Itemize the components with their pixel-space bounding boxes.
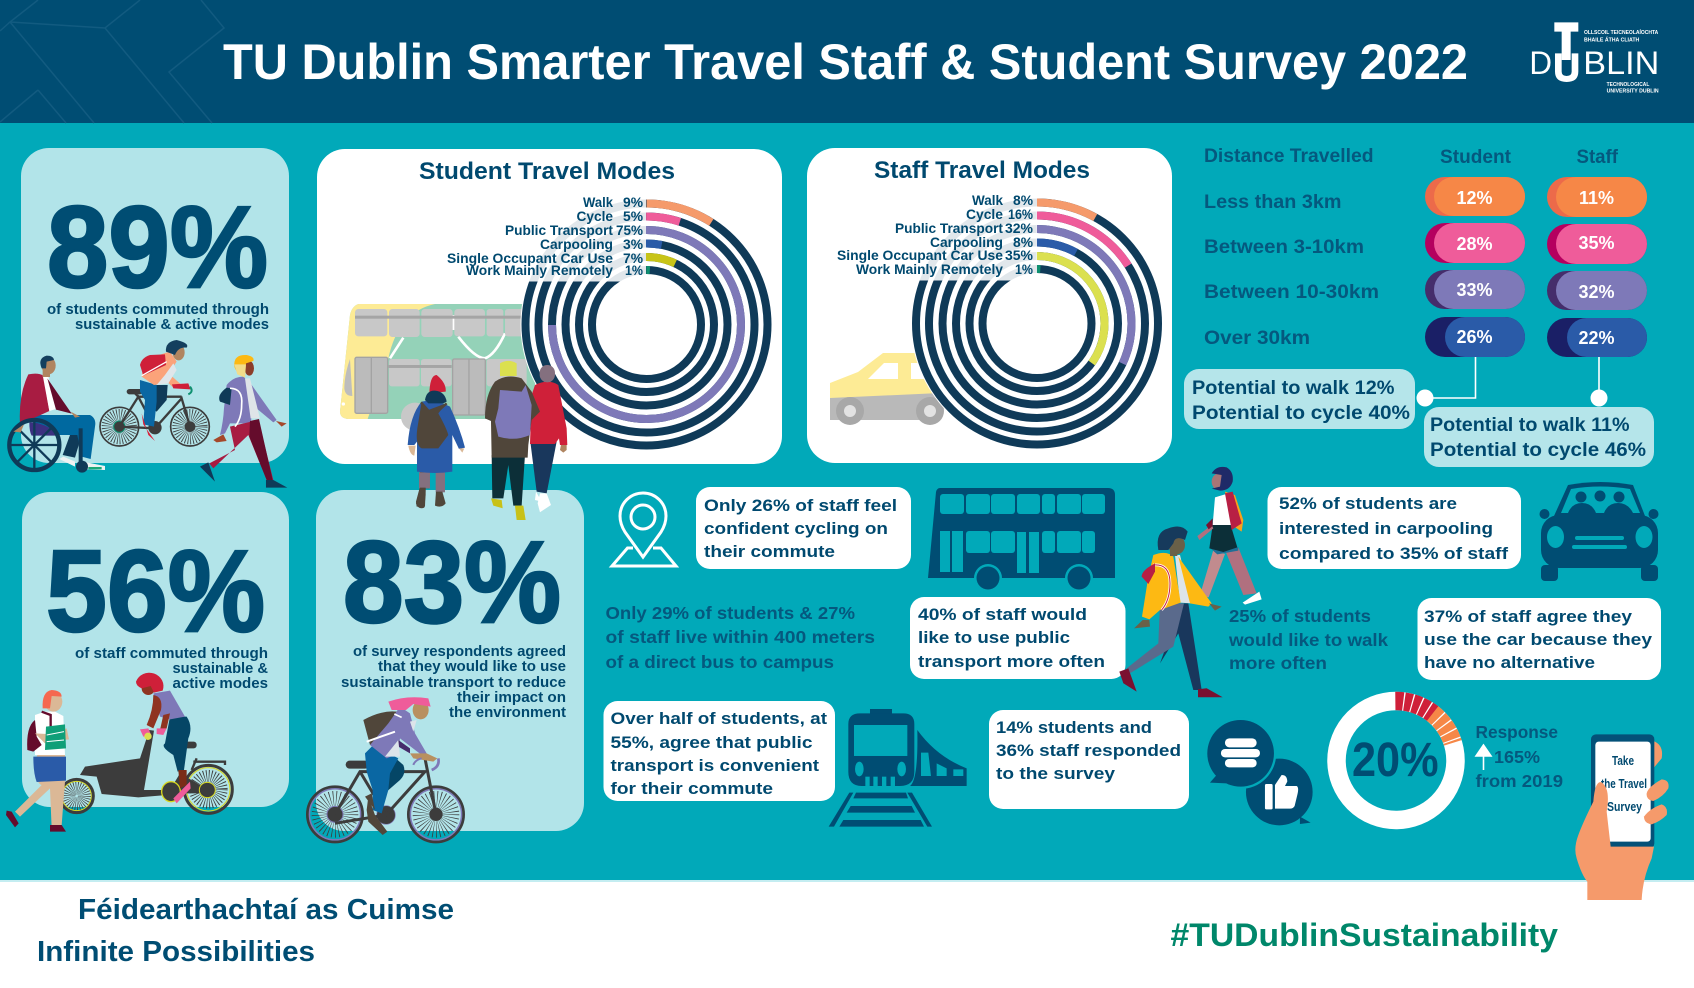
illustration: hand with phone: Survey (1607, 799, 1643, 814)
callout: public transport use: like to use public (918, 628, 1070, 647)
legend: student modes: 3% (623, 236, 644, 252)
legend: staff modes: 35% (1005, 247, 1034, 263)
callout: carpooling: compared to 35% of staff (1279, 544, 1508, 563)
logo: TU Dublin: OLLSCOIL TEICNEOLAÍOCHTA (1584, 28, 1658, 36)
panel: 56% staff: active modes (172, 675, 268, 692)
legend: student modes: 5% (623, 208, 644, 224)
logo: TU Dublin: TECHNOLOGICAL (1607, 82, 1650, 88)
icon: double decker bus (928, 488, 1115, 590)
legend: student modes: Public Transport (505, 222, 613, 238)
legend: staff modes: Cycle (966, 206, 1003, 222)
callout: response rates: 36% staff responded (996, 741, 1181, 760)
legend: staff modes: Single Occupant Car Use (837, 247, 1003, 263)
table: distance travelled: Staff (1576, 147, 1619, 168)
connector: student callout (1416, 357, 1476, 406)
illustration: student and cargo bike (6, 673, 232, 832)
connector: staff callout (1590, 357, 1608, 406)
panel: 83% respondents (316, 490, 584, 831)
hashtag: #TUDublinSustainability (1170, 917, 1558, 953)
table: distance travelled (1204, 146, 1647, 357)
callout: cycling confidence (696, 487, 911, 569)
panel: 56% staff (22, 492, 289, 807)
panel: 89% students: 89% (47, 182, 268, 312)
footer band (0, 880, 1694, 988)
icon: car front (1540, 482, 1658, 581)
text: response increase (1476, 722, 1563, 791)
table: distance travelled: Student (1440, 147, 1512, 168)
pills: staff distances (1547, 177, 1647, 357)
legend: student modes: 1% (625, 262, 643, 278)
pills: staff distances: 11% (1579, 188, 1614, 208)
callout: no alternative: 37% of staff agree they (1424, 607, 1633, 626)
panel: 83% respondents: their impact on (457, 689, 566, 706)
illustration: wheelchair user, cyclist and walker (9, 340, 287, 488)
legend: staff modes: Walk (972, 192, 1003, 208)
panel: staff travel modes (807, 148, 1172, 463)
chart: 20% response donut: 20% (1352, 734, 1438, 787)
chart: 20% response donut (1336, 701, 1456, 820)
legend: staff modes: Work Mainly Remotely (856, 261, 1003, 277)
panel: 83% respondents: 83% (343, 517, 561, 647)
panel: 83% respondents: the environment (449, 704, 566, 721)
pills: staff distances: 32% (1578, 282, 1615, 302)
legend: staff modes: 8% (1013, 234, 1034, 250)
callout: public transport convenient: Over half of students, at (610, 709, 827, 728)
callout: public transport convenient: for their commute (610, 779, 773, 798)
illustration: bus commuters (408, 361, 567, 520)
legend: student modes: Walk (583, 194, 613, 210)
callout: student potential (1184, 369, 1415, 429)
title: TU Dublin Smarter Travel Staff & Student Survey 2022 (223, 34, 1468, 90)
callout: staff potential (1424, 407, 1654, 467)
footer text: English motto: Infinite Possibilities (37, 936, 315, 968)
callout: no alternative (1418, 598, 1661, 680)
pills: staff distances: 35% (1578, 233, 1615, 253)
illustration: hand with phone: the Travel (1601, 776, 1647, 791)
icon: train (829, 709, 967, 827)
legend: student modes: 75% (616, 222, 644, 238)
logo: TU Dublin: UNIVERSITY DUBLIN (1607, 89, 1659, 95)
table: distance travelled: Over 30km (1204, 328, 1310, 349)
panel: 83% respondents: that they would like to use (378, 658, 566, 675)
table: distance travelled: Between 10-30km (1204, 282, 1379, 303)
legend: staff modes: 32% (1005, 220, 1034, 236)
chart: staff radial bars (906, 194, 1163, 450)
callout: carpooling (1268, 487, 1521, 569)
table: distance travelled: Between 3-10km (1204, 237, 1364, 258)
table: distance travelled: Distance Travelled (1204, 146, 1374, 167)
text: bus proximity: Only 29% of students & 27% (606, 603, 855, 623)
legend: staff modes: Public Transport (895, 220, 1003, 236)
panel: 56% staff: of staff commuted through (75, 645, 268, 662)
legend: staff modes: Carpooling (930, 234, 1003, 250)
callout: student potential: Potential to walk 12% (1192, 378, 1395, 399)
panel: 56% staff: 56% (46, 526, 265, 656)
callout: public transport use (910, 597, 1126, 679)
illustration: hand with phone (1575, 734, 1669, 900)
pills: student distances: 33% (1456, 280, 1493, 300)
legend: student modes: 9% (623, 194, 644, 210)
callout: public transport convenient (604, 701, 835, 801)
callout: cycling confidence: Only 26% of staff feel (704, 496, 897, 515)
illustration: cyclist with pink hair (307, 697, 464, 842)
callout: public transport convenient: 55%, agree that public (610, 733, 812, 752)
legend: staff modes: 1% (1015, 261, 1033, 277)
callout: cycling confidence: their commute (704, 542, 835, 561)
header banner (0, 0, 1694, 123)
panel: student travel modes (317, 149, 782, 464)
callout: public transport convenient: transport is convenient (610, 756, 819, 775)
callout: public transport use: transport more often (918, 652, 1105, 671)
text: walking interest: would like to walk (1228, 630, 1388, 650)
logo: TU Dublin: BLIN (1583, 45, 1659, 81)
logo: TU Dublin: D (1529, 45, 1552, 81)
callout: staff potential: Potential to cycle 46% (1430, 440, 1646, 461)
pills: student distances: 12% (1456, 188, 1493, 208)
text: bus proximity: of staff live within 400 meters (606, 627, 875, 647)
legend: student modes (447, 194, 644, 278)
callout: staff potential: Potential to walk 11% (1430, 415, 1630, 436)
callout: no alternative: use the car because they (1424, 630, 1653, 649)
table: distance travelled: Less than 3km (1204, 192, 1342, 213)
text: bus proximity: of a direct bus to campus (606, 652, 834, 672)
panel: 89% students: of students commuted through (47, 301, 269, 318)
pills: student distances: 26% (1456, 327, 1493, 347)
callout: response rates: 14% students and (996, 718, 1152, 737)
icon: location pin (612, 493, 676, 566)
callout: response rates (989, 710, 1189, 809)
legend: staff modes: 8% (1013, 192, 1034, 208)
illustration: yellow car (830, 353, 944, 425)
text: walking interest (1228, 606, 1388, 673)
pills: student distances: 28% (1456, 234, 1493, 254)
callout: no alternative: have no alternative (1424, 653, 1595, 672)
icon: chat bubbles and thumb (1205, 718, 1313, 825)
logo: TU Dublin (1529, 22, 1659, 95)
legend: student modes: Work Mainly Remotely (466, 262, 613, 278)
pills: student distances (1425, 177, 1525, 357)
logo: TU Dublin: BHAILE ÁTHA CLIATH (1584, 37, 1639, 44)
legend: student modes: Single Occupant Car Use (447, 250, 613, 266)
panel: 89% students: sustainable & active modes (75, 316, 269, 333)
heading: student travel modes: Student Travel Modes (419, 158, 675, 185)
legend: staff modes: 16% (1008, 206, 1033, 222)
panel: 89% students (21, 148, 289, 463)
legend: student modes: Carpooling (540, 236, 613, 252)
legend: student modes: 7% (623, 250, 644, 266)
callout: student potential: Potential to cycle 40% (1192, 403, 1410, 424)
text: response increase: from 2019 (1476, 771, 1563, 791)
illustration: green bus (340, 304, 535, 431)
text: bus proximity (606, 603, 875, 672)
callout: carpooling: interested in carpooling (1279, 519, 1493, 538)
legend: student modes: Cycle (576, 208, 613, 224)
panel: 83% respondents: sustainable transport to reduce (341, 674, 566, 691)
footer text: Irish motto: Féidearthachtaí as Cuimse (78, 894, 454, 926)
illustration: two walkers (1119, 467, 1262, 697)
pills: staff distances: 22% (1578, 328, 1615, 348)
callout: response rates: to the survey (996, 764, 1116, 783)
legend: staff modes (837, 192, 1034, 277)
text: response increase: 165% (1494, 747, 1540, 767)
panel: 56% staff: sustainable & (172, 660, 268, 677)
illustration: hand with phone: Take (1612, 753, 1634, 768)
text: walking interest: 25% of students (1229, 606, 1371, 626)
chart: student radial bars (515, 195, 772, 450)
panel: 83% respondents: of survey respondents agreed (353, 643, 566, 660)
text: walking interest: more often (1229, 653, 1327, 673)
callout: cycling confidence: confident cycling on (704, 519, 888, 538)
callout: public transport use: 40% of staff would (918, 605, 1087, 624)
callout: carpooling: 52% of students are (1279, 494, 1457, 513)
heading: staff travel modes: Staff Travel Modes (874, 157, 1090, 184)
text: response increase: Response (1476, 722, 1558, 742)
